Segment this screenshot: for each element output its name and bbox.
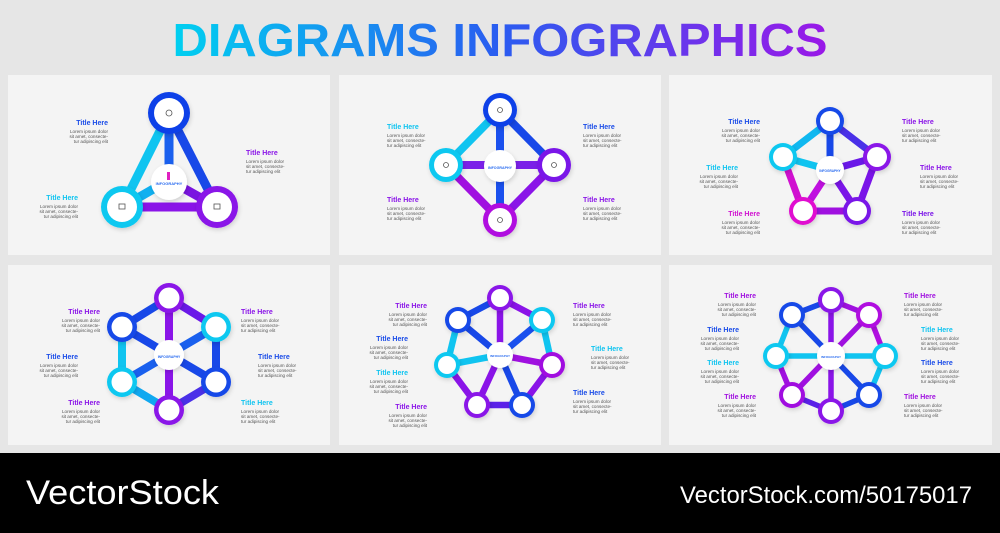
text block [241,400,280,424]
text block: tur adipiscing elit [44,214,79,219]
text block: tur adipiscing elit [573,409,608,414]
panel: diamond: INFOGRAPHY [488,166,513,170]
text block [583,197,622,221]
node [816,107,844,135]
text block: sit amet, consecte- [904,307,943,312]
panel: triangle: INFOGRAPHY [156,181,183,186]
text block: tur adipiscing elit [902,138,937,143]
text block: Title Here [573,390,605,397]
footer bar [0,453,1000,533]
footer url: VectorStock.com/50175017 [680,482,972,509]
node [148,92,190,134]
text block: tur adipiscing elit [921,379,956,384]
text block: Lorem ipsum dolor [370,379,408,384]
node [196,186,238,228]
text block: tur adipiscing elit [258,373,293,378]
text block: sit amet, consecte- [591,360,630,365]
panel: pentagon [669,75,992,255]
text block: Lorem ipsum dolor [70,129,108,134]
text block: Lorem ipsum dolor [573,399,612,404]
text block [241,309,280,333]
text block: tur adipiscing elit [44,373,79,378]
node [818,398,844,424]
text block [921,360,960,384]
text block [591,346,630,370]
text block: sit amet, consecte- [904,408,943,413]
text block: sit amet, consecte- [902,225,941,230]
text block: Lorem ipsum dolor [583,206,622,211]
text block: Title Here [241,309,273,316]
node [201,312,231,342]
text block: sit amet, consecte- [387,211,426,216]
text block: tur adipiscing elit [705,379,740,384]
text block: Title Here [68,400,100,407]
node [107,367,137,397]
text block: sit amet, consecte- [246,164,285,169]
text block: Lorem ipsum dolor [722,128,760,133]
text block: sit amet, consecte- [699,179,738,184]
text block: sit amet, consecte- [39,368,78,373]
text block: Lorem ipsum dolor [921,369,960,374]
text block: Lorem ipsum dolor [40,204,78,209]
text block: sit amet, consecte- [69,134,108,139]
node [789,197,817,225]
text block: Title Here [395,303,427,310]
panel: heptagon [339,265,661,445]
text block: tur adipiscing elit [902,230,937,235]
node [101,186,143,228]
text block: Title Here [376,336,408,343]
text block [700,360,740,384]
text block: sit amet, consecte- [573,404,612,409]
text block: tur adipiscing elit [726,138,761,143]
node [843,197,871,225]
text block: tur adipiscing elit [374,389,409,394]
node [429,148,463,182]
text block: Lorem ipsum dolor [701,336,739,341]
node [154,395,184,425]
footer logo: VectorStock [26,474,220,512]
text block: tur adipiscing elit [722,413,757,418]
text block: Lorem ipsum dolor [583,133,622,138]
text block: sit amet, consecte- [583,211,622,216]
text block [904,394,943,418]
text block: sit amet, consecte- [241,323,280,328]
text block [387,197,426,221]
text block [387,124,426,148]
text block: Title Here [706,165,738,172]
text block [39,195,79,219]
node [856,302,882,328]
text block: sit amet, consecte- [700,341,739,346]
text block [369,336,409,360]
text block: tur adipiscing elit [387,216,422,221]
text block [61,309,101,333]
node [154,283,184,313]
text block: sit amet, consecte- [902,133,941,138]
text block [700,327,740,351]
text block: tur adipiscing elit [241,328,276,333]
text block: Title Here [583,124,615,131]
text block: sit amet, consecte- [721,133,760,138]
text block [369,370,409,394]
node [487,285,513,311]
node [483,93,517,127]
text block: tur adipiscing elit [921,346,956,351]
text block: Title Here [920,165,952,172]
text block: tur adipiscing elit [583,143,618,148]
panel: hexagon [8,265,330,445]
text block: Title Here [707,360,739,367]
text block: tur adipiscing elit [726,230,761,235]
text block [902,211,941,235]
node [856,382,882,408]
text block: sit amet, consecte- [241,414,280,419]
text block: sit amet, consecte- [721,225,760,230]
node [445,307,471,333]
text block: Title Here [921,327,953,334]
text block: Lorem ipsum dolor [573,312,612,317]
panel: pentagon: INFOGRAPHY [819,169,841,173]
text block [920,165,959,189]
text block: Title Here [902,119,934,126]
text block [573,303,612,327]
text block: tur adipiscing elit [393,423,428,428]
panel: diamond [339,75,661,255]
text block: sit amet, consecte- [387,138,426,143]
text block [388,303,428,327]
text block: tur adipiscing elit [573,322,608,327]
text block: tur adipiscing elit [74,139,109,144]
text block: tur adipiscing elit [583,216,618,221]
text block: sit amet, consecte- [369,350,408,355]
text block [39,354,79,378]
text block: Title Here [902,211,934,218]
title: DIAGRAMS INFOGRAPHICS [172,14,828,66]
text block: tur adipiscing elit [66,328,101,333]
text block: tur adipiscing elit [904,413,939,418]
node [863,143,891,171]
text block: tur adipiscing elit [705,346,740,351]
text block: Lorem ipsum dolor [389,312,427,317]
text block: sit amet, consecte- [920,179,959,184]
text block: Lorem ipsum dolor [904,302,943,307]
text block [721,119,761,143]
text block [717,293,757,317]
text block: Title Here [246,150,278,157]
node [483,203,517,237]
node [779,382,805,408]
text block: sit amet, consecte- [39,209,78,214]
text block: Lorem ipsum dolor [387,206,426,211]
panel: octagon: INFOGRAPHY [821,355,841,359]
text block: Lorem ipsum dolor [920,174,959,179]
text block: Lorem ipsum dolor [387,133,426,138]
text block: Title Here [728,119,760,126]
node [763,343,789,369]
text block: Lorem ipsum dolor [591,355,630,360]
text block: Lorem ipsum dolor [718,302,756,307]
text block: Title Here [46,354,78,361]
text block: sit amet, consecte- [921,374,960,379]
text block: sit amet, consecte- [61,323,100,328]
text block: tur adipiscing elit [904,312,939,317]
node [201,367,231,397]
node [107,312,137,342]
text block [573,390,612,414]
text block: Title Here [46,195,78,202]
text block: Lorem ipsum dolor [701,369,739,374]
text block: Title Here [573,303,605,310]
text block: Lorem ipsum dolor [902,220,941,225]
text block: tur adipiscing elit [393,322,428,327]
text block: Title Here [707,327,739,334]
node [537,148,571,182]
text block: Title Here [904,394,936,401]
text block: Title Here [395,404,427,411]
node [509,392,535,418]
panel: heptagon: INFOGRAPHY [490,354,510,358]
node [779,302,805,328]
text block: Lorem ipsum dolor [370,345,408,350]
text block: Title Here [728,211,760,218]
text block: Lorem ipsum dolor [700,174,738,179]
text block: Title Here [724,394,756,401]
node [529,307,555,333]
text block: Lorem ipsum dolor [921,336,960,341]
text block: sit amet, consecte- [258,368,297,373]
text block: Title Here [76,120,108,127]
panel: hexagon: INFOGRAPHY [158,355,181,359]
text block: Lorem ipsum dolor [258,363,297,368]
text block: Lorem ipsum dolor [40,363,78,368]
text block [583,124,622,148]
text block: Lorem ipsum dolor [241,318,280,323]
text block: Title Here [68,309,100,316]
text block [904,293,943,317]
text block: Lorem ipsum dolor [718,403,756,408]
node [769,143,797,171]
text block: tur adipiscing elit [591,365,626,370]
text block: Lorem ipsum dolor [241,409,280,414]
text block: Title Here [921,360,953,367]
text block: sit amet, consecte- [921,341,960,346]
text block: Title Here [376,370,408,377]
text block: sit amet, consecte- [583,138,622,143]
text block: Lorem ipsum dolor [722,220,760,225]
text block: tur adipiscing elit [66,419,101,424]
text block: tur adipiscing elit [704,184,739,189]
text block: tur adipiscing elit [374,355,409,360]
text block: Title Here [387,124,419,131]
text block: Lorem ipsum dolor [62,318,100,323]
text block: tur adipiscing elit [241,419,276,424]
text block [699,165,739,189]
text block: tur adipiscing elit [722,312,757,317]
node [434,352,460,378]
text block: Title Here [904,293,936,300]
node [464,392,490,418]
text block [246,150,285,174]
node [818,287,844,313]
text block: Title Here [258,354,290,361]
text block: sit amet, consecte- [717,408,756,413]
text block: Title Here [591,346,623,353]
text block [388,404,428,428]
text block: Lorem ipsum dolor [246,159,285,164]
text block: Title Here [724,293,756,300]
text block: sit amet, consecte- [717,307,756,312]
text block [902,119,941,143]
text block: Title Here [583,197,615,204]
text block [721,211,761,235]
text block: sit amet, consecte- [573,317,612,322]
text block: sit amet, consecte- [388,418,427,423]
panel: triangle [8,75,330,255]
node [539,352,565,378]
text block: Lorem ipsum dolor [904,403,943,408]
text block: tur adipiscing elit [387,143,422,148]
text block: tur adipiscing elit [920,184,955,189]
text block [69,120,109,144]
text block: tur adipiscing elit [246,169,281,174]
text block: Title Here [387,197,419,204]
text block [61,400,101,424]
panel: octagon [669,265,992,445]
text block [258,354,297,378]
text block: Lorem ipsum dolor [62,409,100,414]
text block: sit amet, consecte- [61,414,100,419]
text block: sit amet, consecte- [388,317,427,322]
text block: Title Here [241,400,273,407]
text block [921,327,960,351]
node [872,343,898,369]
text block: sit amet, consecte- [700,374,739,379]
text block [717,394,757,418]
text block: sit amet, consecte- [369,384,408,389]
text block: Lorem ipsum dolor [902,128,941,133]
text block: Lorem ipsum dolor [389,413,427,418]
